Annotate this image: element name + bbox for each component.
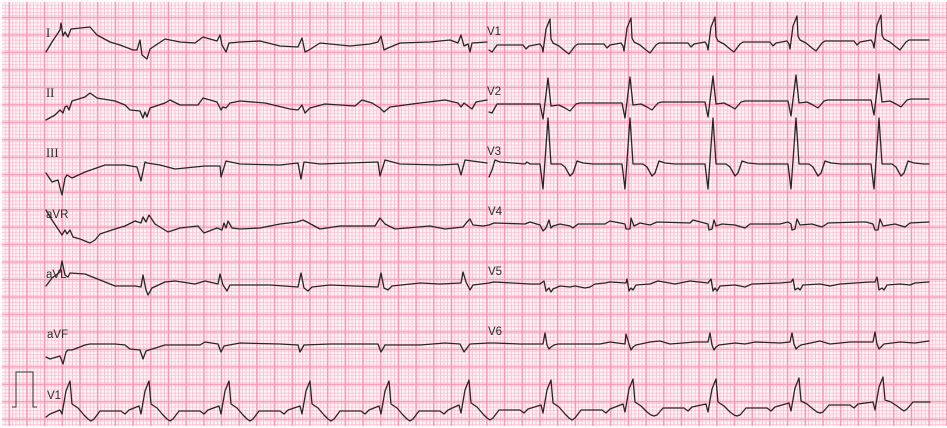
lead V2 xyxy=(487,74,929,119)
calibration pulse xyxy=(12,372,37,407)
lead III xyxy=(46,146,487,195)
lead V6 xyxy=(488,326,929,350)
lead V1: V1 xyxy=(487,26,501,38)
lead V6: V6 xyxy=(488,326,502,338)
lead V4: V4 xyxy=(488,206,503,218)
lead aVF: aVF xyxy=(47,329,68,341)
lead aVF xyxy=(46,329,489,364)
lead V1 xyxy=(487,15,929,54)
lead aVL xyxy=(46,261,489,295)
lead V5: V5 xyxy=(488,266,502,278)
lead aVR: aVR xyxy=(46,209,68,221)
lead II: II xyxy=(46,86,54,100)
lead II xyxy=(46,86,487,120)
lead I xyxy=(46,23,487,59)
lead aVL: aVL xyxy=(46,269,67,281)
rhythm strip V1: V1 xyxy=(47,390,61,402)
lead V3: V3 xyxy=(487,146,501,158)
lead aVR xyxy=(46,209,489,243)
rhythm strip V1 xyxy=(46,377,930,421)
lead V4 xyxy=(488,206,929,231)
lead V5 xyxy=(488,266,929,292)
lead I: I xyxy=(46,26,50,40)
lead V3 xyxy=(487,118,929,189)
lead III: III xyxy=(46,146,58,160)
lead V2: V2 xyxy=(487,86,501,98)
